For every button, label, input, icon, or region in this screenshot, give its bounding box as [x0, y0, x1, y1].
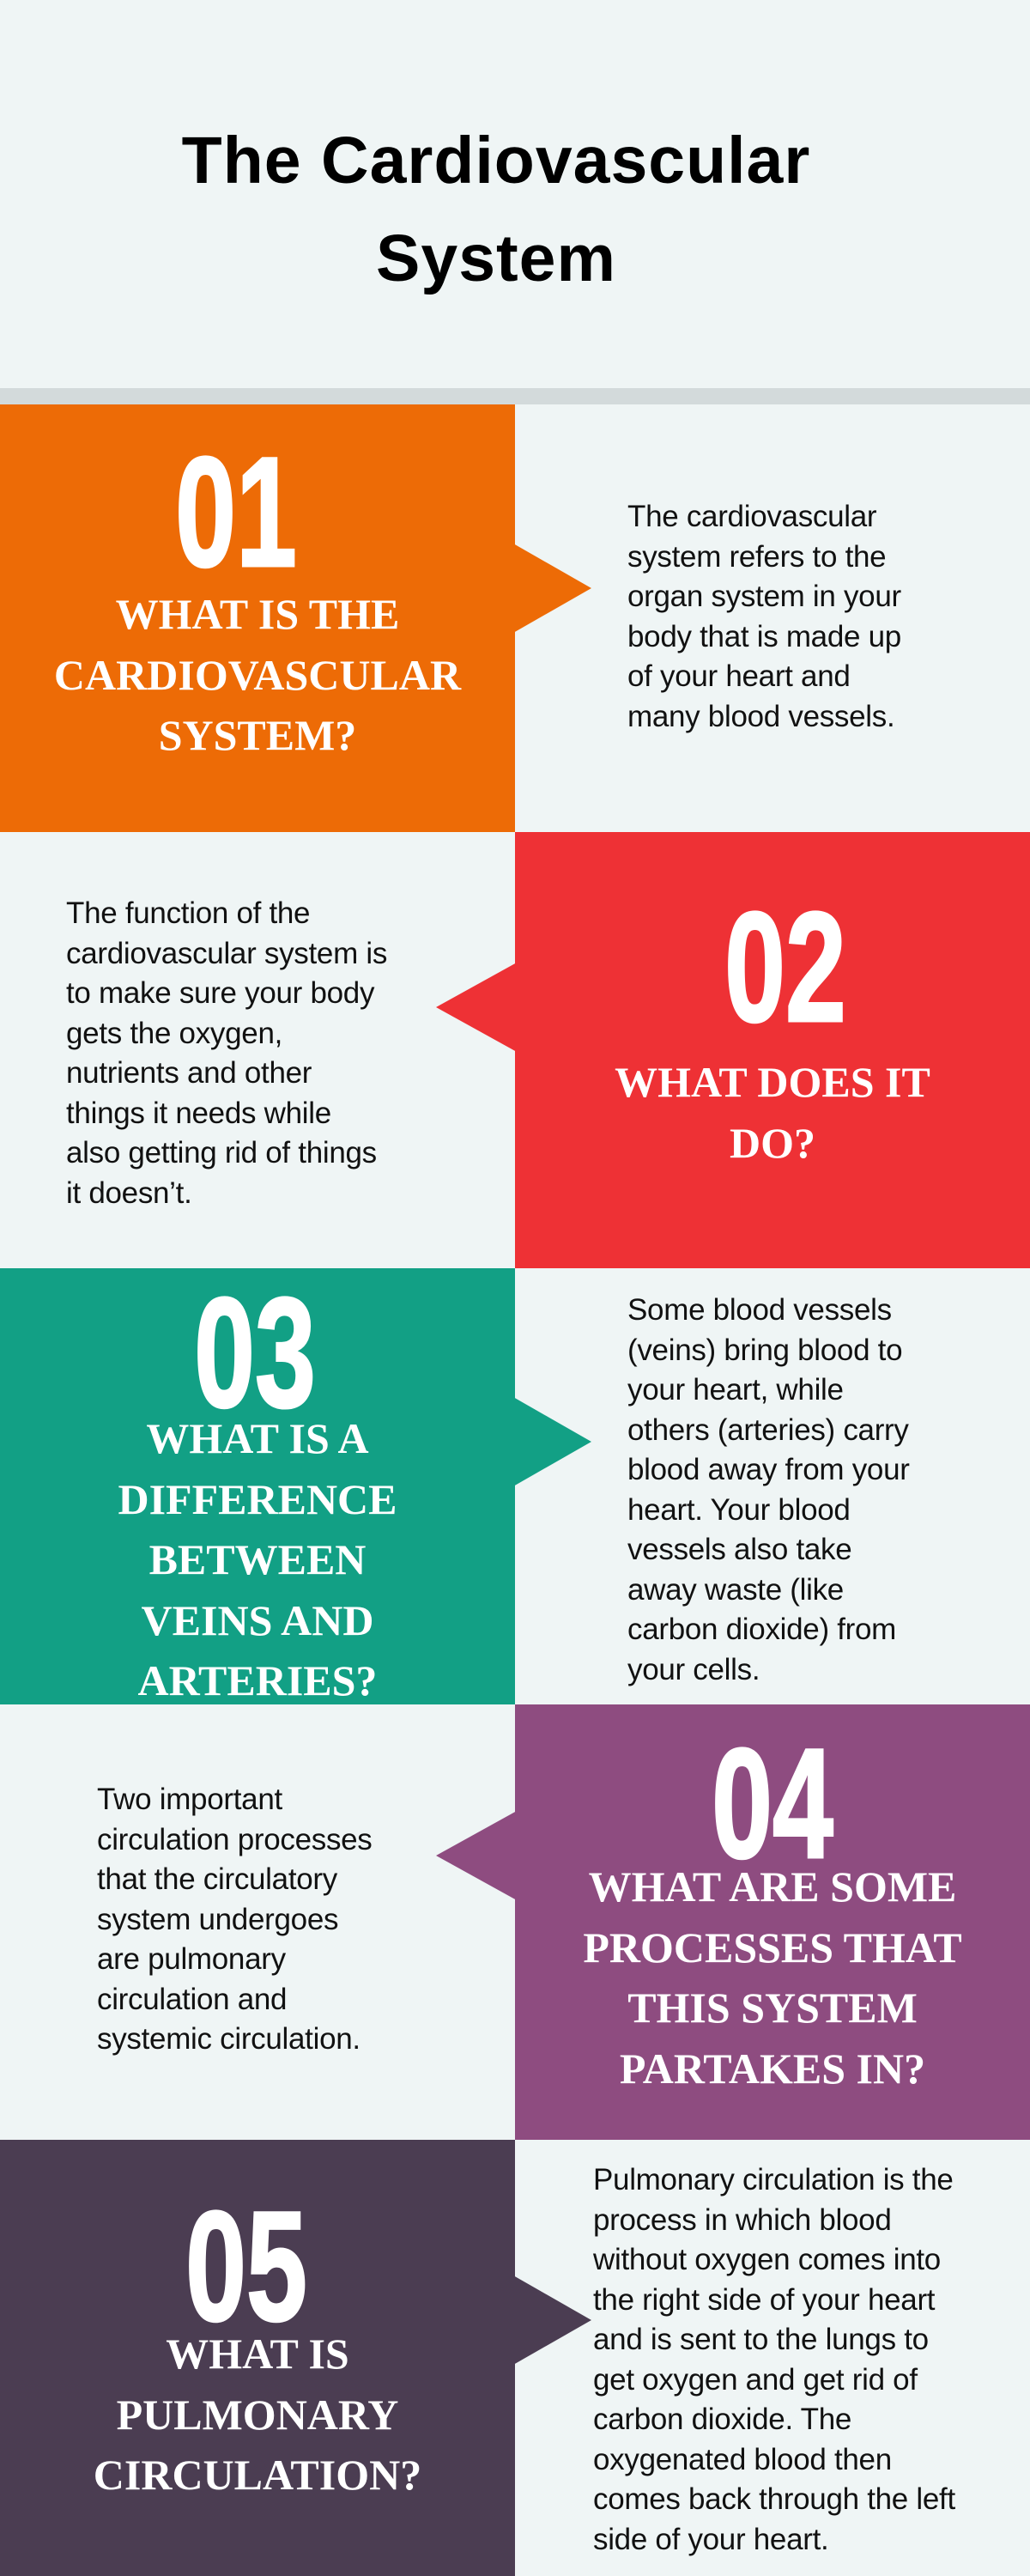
text 03: others (arteries) carry: [627, 1413, 909, 1446]
text 01: many blood vessels.: [627, 699, 894, 733]
text 05: oxygenated blood then: [593, 2442, 892, 2476]
text 01: of your heart and: [627, 659, 851, 693]
text 02: cardiovascular system is: [66, 936, 387, 970]
heading 01: CARDIOVASCULAR: [54, 651, 461, 699]
block: purple: [515, 1704, 1030, 2140]
text 04: systemic circulation.: [97, 2022, 360, 2056]
text 03: Some blood vessels: [627, 1293, 892, 1327]
heading 01: SYSTEM?: [159, 711, 356, 759]
text 02: to make sure your body: [66, 976, 374, 1010]
text 05: without oxygen comes into: [593, 2243, 941, 2276]
heading 03: DIFFERENCE: [118, 1475, 397, 1523]
text 05: process in which blood: [593, 2203, 891, 2236]
text 05: get oxygen and get rid of: [593, 2363, 918, 2396]
text 02: things it needs while: [66, 1096, 331, 1130]
text 01: system refers to the: [627, 539, 886, 574]
block: dark: [0, 2140, 515, 2576]
text 05: carbon dioxide. The: [593, 2403, 851, 2436]
number 05: 05: [185, 2178, 307, 2354]
number 01: 01: [175, 424, 297, 599]
panel: section 02: [66, 832, 1030, 1268]
text 04: are pulmonary: [97, 1942, 286, 1976]
number 02: 02: [724, 879, 846, 1054]
heading 03: ARTERIES?: [138, 1656, 377, 1704]
heading 03: WHAT IS A: [146, 1414, 369, 1462]
arrow 05: [515, 2276, 591, 2364]
title: The Cardiovascular: [182, 124, 810, 197]
heading 04: PROCESSES THAT: [583, 1923, 962, 1971]
text 01: [627, 500, 901, 733]
arrow 03: [515, 1398, 591, 1485]
text 05: [593, 2163, 955, 2555]
text 02: gets the oxygen,: [66, 1017, 282, 1049]
text 03: away waste (like: [627, 1573, 844, 1606]
panel: section 03: [0, 1265, 910, 1704]
arrow 01: [515, 544, 591, 632]
heading 04: THIS SYSTEM: [627, 1984, 918, 2032]
heading 02: DO?: [730, 1118, 815, 1166]
heading 04: PARTAKES IN?: [620, 2044, 925, 2092]
block: orange: [0, 404, 515, 832]
text 02: also getting rid of things: [66, 1136, 377, 1170]
text 04: Two important: [97, 1783, 282, 1816]
panel: section 01: [0, 404, 901, 832]
title: System: [376, 222, 616, 295]
text 05: comes back through the left: [593, 2482, 955, 2516]
panel: section 05: [0, 2140, 955, 2576]
number 04: 04: [712, 1716, 833, 1891]
text 02: it doesn’t.: [66, 1176, 192, 1209]
text 04: circulation processes: [97, 1822, 373, 1856]
arrow 02: [436, 963, 515, 1051]
text 04: that the circulatory: [97, 1862, 337, 1896]
heading 05: WHAT IS: [166, 2330, 349, 2378]
heading 05: PULMONARY: [117, 2391, 398, 2439]
text 01: body that is made up: [627, 620, 901, 653]
text 05: side of your heart.: [593, 2523, 828, 2555]
text 03: (veins) bring blood to: [627, 1333, 902, 1367]
heading 02: [615, 1058, 930, 1166]
heading 01: WHAT IS THE: [116, 590, 399, 638]
heading 04: WHAT ARE SOME: [589, 1862, 956, 1911]
text 04: [97, 1783, 373, 2056]
text 03: carbon dioxide) from: [627, 1613, 896, 1646]
heading 02: WHAT DOES IT: [615, 1058, 930, 1106]
text 04: system undergoes: [97, 1903, 338, 1935]
text 02: [66, 896, 387, 1209]
arrow 04: [436, 1812, 515, 1899]
text 03: [627, 1293, 910, 1686]
text 02: The function of the: [66, 896, 310, 930]
title: [182, 124, 810, 295]
block: teal: [0, 1268, 515, 1704]
heading 04: [583, 1862, 962, 2092]
text 05: the right side of your heart: [593, 2282, 935, 2317]
text 03: your cells.: [627, 1652, 760, 1686]
number 03: 03: [194, 1265, 316, 1440]
text 05: and is sent to the lungs to: [593, 2323, 929, 2356]
text 04: circulation and: [97, 1982, 287, 2016]
panel: section 04: [97, 1704, 1030, 2140]
heading 05: [94, 2330, 421, 2499]
text 02: nutrients and other: [66, 1056, 312, 1090]
text 01: The cardiovascular: [627, 500, 876, 533]
text 03: vessels also take: [627, 1533, 851, 1566]
block: red: [515, 832, 1030, 1268]
heading 03: BETWEEN: [149, 1535, 366, 1583]
text 03: blood away from your: [627, 1453, 910, 1486]
heading 03: [118, 1414, 397, 1704]
text 03: heart. Your blood: [627, 1492, 851, 1527]
heading 03: VEINS AND: [142, 1595, 373, 1643]
text 03: your heart, while: [627, 1373, 844, 1406]
heading 05: CIRCULATION?: [94, 2451, 421, 2499]
heading 01: [54, 590, 462, 759]
text 01: organ system in your: [627, 580, 901, 613]
text 05: Pulmonary circulation is the: [593, 2163, 954, 2196]
divider band: [0, 388, 1030, 404]
